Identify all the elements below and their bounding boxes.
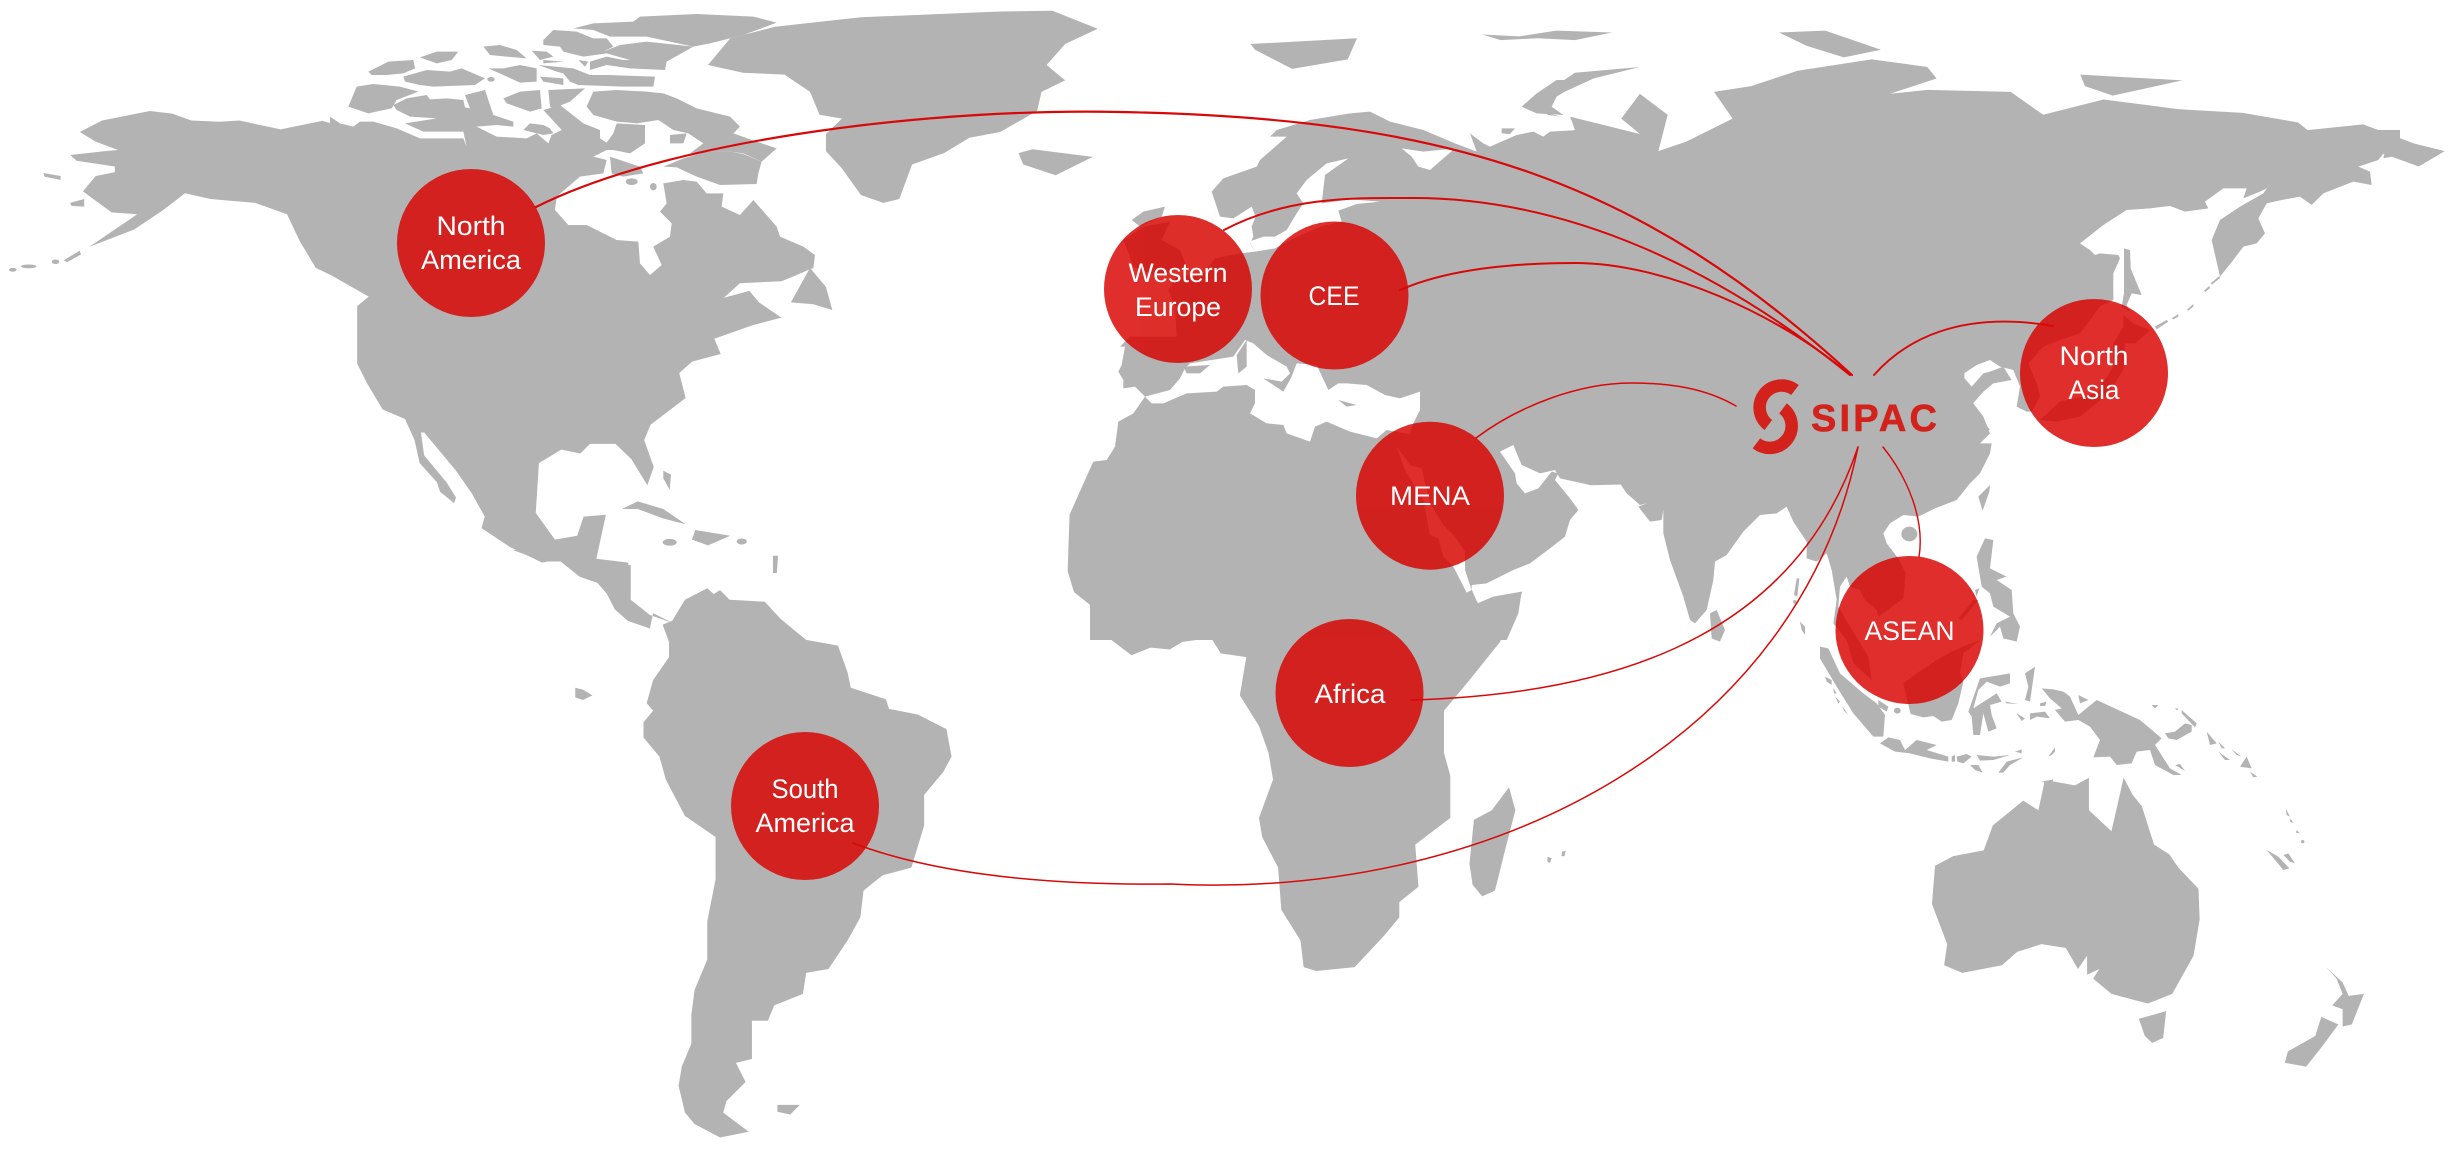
inland seas: Red Sea	[1397, 447, 1472, 593]
region bubbles	[397, 169, 2168, 880]
landmass: Australia, Tasmania and New Zealand	[1547, 778, 2364, 1067]
landmass: South Asia and Indochina	[1620, 400, 2020, 680]
landmass: Asia interior and Arctic coast	[1019, 31, 2445, 485]
label: North Asia: North	[2060, 341, 2128, 371]
label: Western Europe: Western	[1128, 258, 1228, 288]
route: Western Europe	[1224, 198, 1850, 375]
route: Africa	[1411, 447, 1858, 700]
landmass: Indonesia, Papua and Pacific islands	[1820, 640, 2304, 870]
route: North America	[536, 112, 1852, 375]
inland seas: White Sea	[1402, 148, 1455, 170]
landmass: Canadian Arctic and northern coast	[330, 14, 815, 282]
icon: S mark	[1756, 385, 1795, 448]
landmass: North America and Greenland	[9, 11, 1098, 600]
bubble labels: Europe	[1135, 292, 1221, 322]
wordmark: SIPAC	[1811, 398, 1937, 440]
label: MENA: MENA	[1390, 481, 1470, 511]
bubble labels	[421, 211, 2128, 838]
landmass: East Asia, Japan and Kamchatka	[1900, 130, 2400, 430]
SIPAC logo	[1756, 385, 1937, 448]
route: MENA	[1476, 383, 1736, 438]
label: North America: North	[436, 211, 506, 241]
label: Africa: Africa	[1314, 679, 1386, 709]
label: CEE: CEE	[1308, 281, 1360, 311]
route: CEE	[1400, 263, 1850, 375]
route: ASEAN	[1883, 447, 1920, 557]
label: South America: South	[772, 774, 838, 804]
bubble labels: America	[756, 808, 855, 838]
landmass: South and Central America, Africa, Madagascar	[513, 454, 1522, 1137]
route: North Asia	[1874, 322, 2053, 375]
connection lines from SIPAC to regions	[536, 112, 2053, 885]
bubble labels: America	[421, 245, 522, 275]
inland seas: Baltic	[1249, 158, 1380, 252]
landmass: Scandinavia and Europe	[1118, 80, 1590, 485]
label: ASEAN: ASEAN	[1864, 616, 1954, 646]
bubble labels: Asia	[2068, 375, 2120, 405]
landmass: North Africa and Arabia	[1090, 385, 1578, 640]
route: South America	[853, 447, 1858, 885]
